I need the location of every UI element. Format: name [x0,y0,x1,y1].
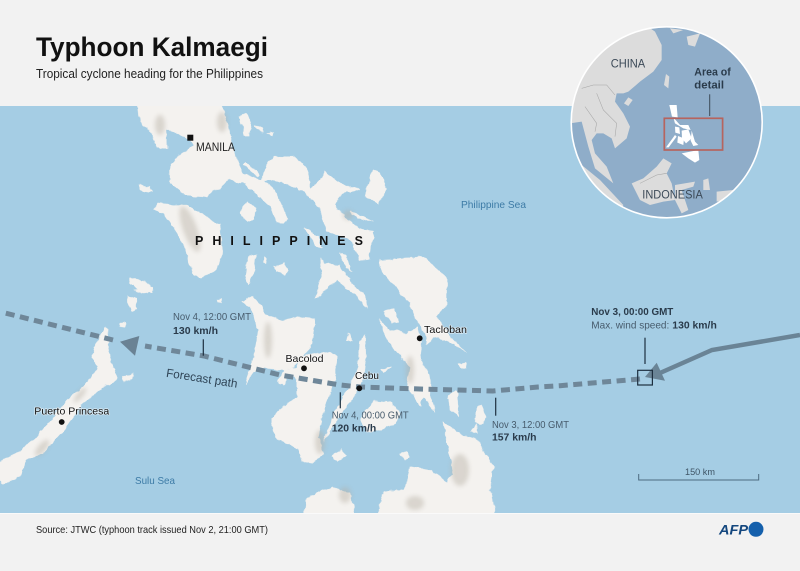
label: forecast path: Forecast path [165,366,239,391]
callout: Nov 3 00:00: Max. wind speed: [591,319,669,331]
terrain shading [33,112,469,510]
inset borders [582,85,667,183]
inset: leader line [709,94,711,116]
white divider above footer [0,513,800,514]
callout: Nov 3 00:00: Nov 3, 00:00 GMT [591,306,674,318]
sea label: Philippine Sea: Philippine Sea [461,199,526,211]
icon: forecast arrow head [120,336,139,356]
city: Tacloban [417,324,467,341]
subtitle: Tropical cyclone heading for the Philippines [36,67,263,81]
inset label: area of detail: Area of [694,67,731,79]
callout: Nov 3 12:00: 157 km/h [492,432,536,444]
inset locator globe [570,26,763,219]
inset land [572,28,733,214]
map panel: Philippines detail [0,98,800,520]
leader: Nov 4 00:00 [340,392,341,408]
forecast track (dashed) [145,346,640,391]
callout: Nov 4 12:00: 130 km/h [173,325,218,337]
scale bar: 150 km [685,467,715,478]
callout: Nov 3 12:00 [492,421,569,440]
callout: Nov 3 00:00: 130 km/h [672,319,717,331]
inset Philippines [666,105,699,163]
city: Cebu [355,370,379,391]
inset label: area of detail: detail [694,80,724,92]
callout: Nov 3 00:00 [592,308,716,330]
country label: Philippines: PHILIPPINES [195,234,363,248]
inset label: area of detail [694,67,731,92]
land: Luzon and Mindoro [130,98,387,293]
leader: Nov 3 12:00 [495,398,496,416]
leader: Nov 4 12:00 [202,339,204,356]
callout: Nov 4 12:00 [174,313,251,334]
logo: AFP: AFP [718,522,749,538]
inset label: Indonesia: INDONESIA [642,187,703,201]
sea label: Sulu Sea: Sulu Sea [135,475,175,487]
city: Puerto Princesa: Puerto Princesa [34,406,109,418]
callout: Nov 4 00:00: 120 km/h [332,423,376,435]
city: Manila: MANILA [196,142,235,154]
city: Bacolod [286,353,324,371]
city: Manila [187,135,235,154]
scale bar [639,467,759,480]
source note: Source: JTWC (typhoon track issued Nov 2, 21:00 GMT) [36,524,268,536]
city: Tacloban: Tacloban [424,324,467,336]
land masses [0,98,497,520]
callout: Nov 4 00:00: Nov 4, 00:00 GMT [332,409,409,421]
marker: Nov 3 position box [638,338,652,385]
callout: Nov 4 12:00: Nov 4, 12:00 GMT [173,311,252,323]
inset label: China: CHINA [611,56,645,70]
observed track (solid arrow) [645,335,800,381]
logo: AFP [718,522,764,538]
city: Cebu: Cebu [355,370,379,382]
sea [0,106,800,513]
callout: Nov 4 00:00 [332,412,408,432]
city: Bacolod: Bacolod [286,353,324,365]
land: Visayas and Mindanao [272,253,497,520]
callout: Nov 3 12:00: Nov 3, 12:00 GMT [492,419,570,431]
inset: area of detail rectangle [664,118,723,150]
land: Panay and Palawan [0,290,315,485]
title: Typhoon Kalmaegi [36,32,268,62]
city: Puerto Princesa [34,406,109,425]
